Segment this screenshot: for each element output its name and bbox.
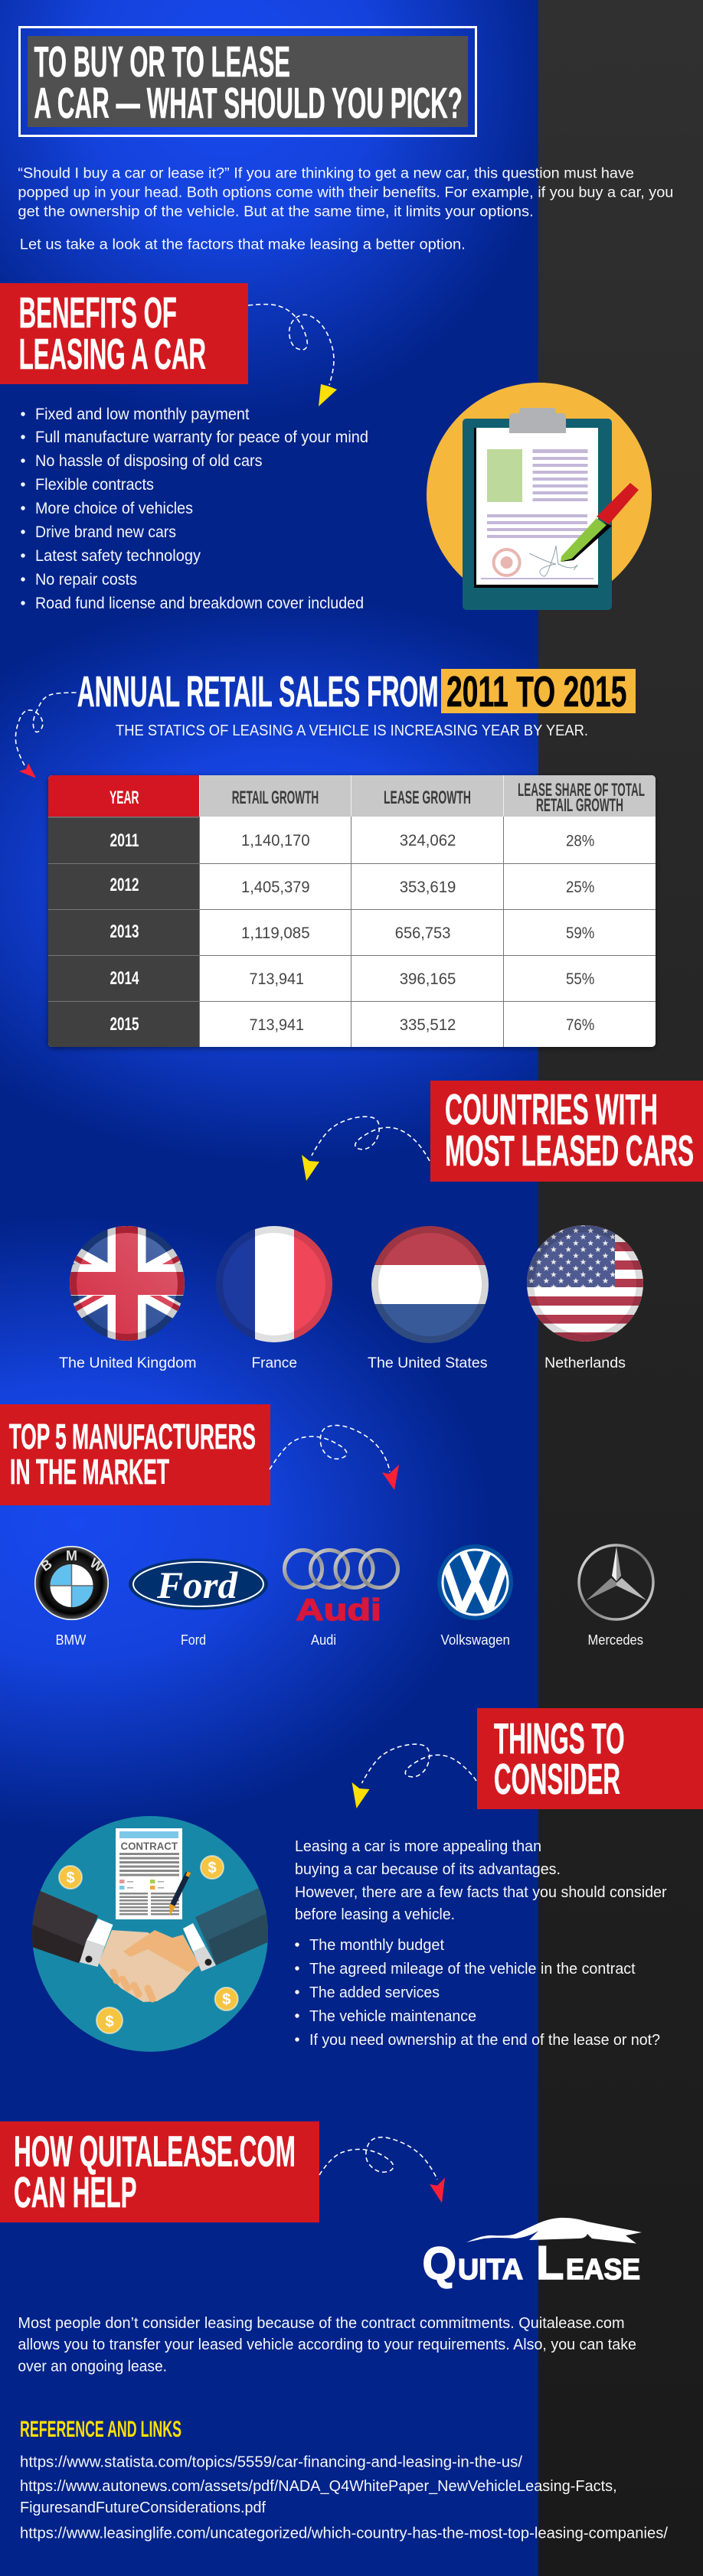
benefits list: No repair costs <box>35 571 137 589</box>
row 2012 <box>110 875 594 896</box>
heading: quitalease <box>0 2121 319 2222</box>
quitalease paragraph <box>18 2315 636 2375</box>
table header: RETAIL GROWTH <box>536 795 623 816</box>
quitalease paragraph: over an ongoing lease. <box>18 2359 167 2375</box>
panel: things to consider <box>23 1708 703 2052</box>
row 2015: 713,941 <box>250 1016 304 1034</box>
row 2015 <box>110 1014 594 1035</box>
arrow: dashed yellow <box>352 1744 476 1808</box>
row 2013 <box>110 921 594 942</box>
row 2013: 656,753 <box>395 924 450 942</box>
heading: references: REFERENCE AND LINKS <box>20 2417 181 2442</box>
country labels <box>59 1355 626 1371</box>
row 2013: 1,119,085 <box>241 924 310 942</box>
row 2014: 2014 <box>110 968 139 989</box>
row 2012: 353,619 <box>400 879 456 896</box>
row 2011 <box>110 830 594 851</box>
contract sheet: CONTRACT <box>121 1840 178 1852</box>
row 2011: 28% <box>566 833 594 849</box>
heading: manufacturers <box>0 1404 270 1505</box>
benefits list: Flexible contracts <box>35 476 154 494</box>
panel: countries <box>12 1081 703 1371</box>
arrow: dashed yellow <box>302 1117 430 1181</box>
row 2012: 1,405,379 <box>241 879 310 896</box>
panel: how quitalease can help <box>0 2121 642 2375</box>
consider list: The vehicle maintenance <box>309 2007 476 2025</box>
table header: YEAR <box>110 787 139 808</box>
row 2012: 2012 <box>110 875 139 895</box>
benefits list: Full manufacture warranty for peace of your mind <box>35 429 368 446</box>
logo: Mercedes <box>579 1545 653 1619</box>
intro text <box>18 165 673 253</box>
logo: Quita Lease: EASE <box>566 2254 640 2286</box>
quitalease paragraph: Most people don’t consider leasing because of the contract commitments. Quitalease.com <box>18 2315 625 2332</box>
logo: BMW <box>34 1546 109 1620</box>
title block <box>20 28 476 136</box>
reference links: https://www.autonews.com/assets/pdf/NADA_Q4WhitePaper_NewVehicleLeasing-Facts, <box>20 2478 617 2495</box>
table header: RETAIL GROWTH <box>232 787 319 808</box>
row 2013: 2013 <box>110 921 139 942</box>
flag: France <box>216 1226 332 1342</box>
benefits list: Drive brand new cars <box>35 523 176 541</box>
row 2011: 2011 <box>110 830 139 851</box>
benefits list: Road fund license and breakdown cover included <box>35 595 364 612</box>
country labels: France <box>251 1355 297 1371</box>
flag: Netherlands colours <box>371 1226 489 1343</box>
icon: clipboard contract <box>427 383 652 610</box>
logo: Ford <box>129 1558 268 1610</box>
heading: manufacturers: TOP 5 MANUFACTURERS <box>9 1417 256 1456</box>
coin dollar signs: $ <box>66 1870 75 1886</box>
consider list: The monthly budget <box>309 1936 444 1954</box>
heading: manufacturers: IN THE MARKET <box>10 1452 169 1492</box>
panel: references <box>20 2417 668 2542</box>
benefits list <box>21 406 368 612</box>
reference links: FiguresandFutureConsiderations.pdf <box>20 2499 266 2516</box>
manufacturer labels: Audi <box>311 1632 336 1648</box>
heading: countries <box>430 1081 703 1182</box>
contract sheet <box>116 1828 182 1919</box>
benefits list: No hassle of disposing of old cars <box>35 452 262 470</box>
benefits list: Latest safety technology <box>35 547 201 565</box>
cuffs <box>80 1919 216 1971</box>
subheading: THE STATICS OF LEASING A VEHICLE IS INCREASING YEAR BY YEAR. <box>116 722 588 739</box>
sleeves <box>32 1888 268 1965</box>
panel: annual retail sales <box>15 667 656 1047</box>
logo: Audi <box>285 1550 398 1627</box>
arrow: dashed red <box>15 693 77 778</box>
arrow: dashed yellow <box>248 305 337 406</box>
pen <box>169 1873 190 1916</box>
coins <box>59 1856 238 2033</box>
country labels: Netherlands <box>544 1355 626 1371</box>
row 2014: 713,941 <box>250 970 304 988</box>
arrow: dashed red <box>270 1425 399 1490</box>
logo: Quita Lease: Q <box>423 2238 456 2289</box>
heading: things to consider <box>477 1708 703 1809</box>
consider list <box>295 1936 660 2049</box>
row 2014 <box>110 968 594 989</box>
panel: manufacturers <box>0 1404 653 1648</box>
coin dollar signs <box>66 1860 231 2030</box>
intro text: get the ownership of the vehicle. But at the same time, it limits your options. <box>18 204 534 220</box>
heading: benefits: BENEFITS OF <box>19 289 177 337</box>
coin dollar signs: $ <box>222 1991 231 2008</box>
consider list: The agreed mileage of the vehicle in the contract <box>309 1960 636 1978</box>
heading: quitalease: CAN HELP <box>14 2168 137 2217</box>
intro text: “Should I buy a car or lease it?” If you are thinking to get a new car, this question must have <box>18 165 634 182</box>
table header <box>110 780 645 816</box>
table header: LEASE GROWTH <box>384 787 471 808</box>
manufacturer labels: Volkswagen <box>441 1632 510 1648</box>
row 2015: 335,512 <box>400 1016 456 1034</box>
table <box>48 775 656 1047</box>
country labels: The United Kingdom <box>59 1355 196 1371</box>
coin dollar signs: $ <box>208 1860 217 1877</box>
title text <box>34 37 463 128</box>
logo: Audi: Audi <box>296 1593 381 1627</box>
hands <box>99 1930 199 2002</box>
heading: quitalease: HOW QUITALEASE.COM <box>14 2128 296 2177</box>
row 2011: 1,140,170 <box>241 832 310 849</box>
quitalease paragraph: allows you to transfer your leased vehicle according to your requirements. Also, you can take <box>18 2336 636 2353</box>
logo: Quita Lease <box>423 2218 642 2290</box>
consider intro text: before leasing a vehicle. <box>295 1906 455 1923</box>
row 2014: 55% <box>566 970 594 988</box>
intro text: popped up in your head. Both options come with their benefits. For example, if you buy a car, you <box>18 184 673 201</box>
logo: BMW: W <box>87 1555 106 1575</box>
row 2015: 2015 <box>110 1014 139 1035</box>
manufacturer labels: Mercedes <box>588 1632 643 1648</box>
manufacturer labels <box>56 1632 643 1648</box>
consider list: The added services <box>309 1984 440 2001</box>
logo: BMW: B <box>38 1556 55 1574</box>
benefits list: Fixed and low monthly payment <box>35 406 250 423</box>
consider intro text: buying a car because of its advantages. <box>295 1860 561 1878</box>
coin dollar signs: $ <box>105 2014 114 2030</box>
reference links <box>20 2454 668 2542</box>
flag: UK <box>70 1226 185 1341</box>
row 2011: 324,062 <box>400 832 456 849</box>
logo: Ford: Ford <box>156 1564 238 1606</box>
consider intro text: Leasing a car is more appealing than <box>295 1837 541 1855</box>
manufacturer labels: Ford <box>181 1632 206 1648</box>
row 2014: 396,165 <box>400 970 456 988</box>
logo: Quita Lease: UITA <box>458 2254 523 2286</box>
logo: BMW: M <box>66 1548 77 1564</box>
benefits list: More choice of vehicles <box>35 500 193 517</box>
row 2013: 59% <box>566 924 594 942</box>
manufacturer labels: BMW <box>56 1632 86 1648</box>
logo: Quita Lease: L <box>536 2237 564 2290</box>
heading: benefits <box>0 283 248 384</box>
country labels: The United States <box>368 1355 487 1371</box>
consider intro text <box>295 1837 667 1923</box>
intro text: Let us take a look at the factors that make leasing a better option. <box>20 236 466 253</box>
flag: USA <box>527 1224 643 1342</box>
reference links: https://www.statista.com/topics/5559/car-financing-and-leasing-in-the-us/ <box>20 2454 522 2470</box>
title text: TO BUY OR TO LEASE <box>34 37 290 86</box>
row 2015: 76% <box>566 1016 594 1034</box>
reference links: https://www.leasinglife.com/uncategorized/which-country-has-the-most-top-leasing-companies/ <box>20 2525 668 2542</box>
row 2012: 25% <box>566 879 594 896</box>
consider list: If you need ownership at the end of the lease or not? <box>309 2031 660 2049</box>
panel: benefits of leasing <box>0 283 652 612</box>
heading: benefits: LEASING A CAR <box>19 330 206 379</box>
icon: handshake and contract <box>23 1816 276 2052</box>
arrow: dashed red <box>319 2137 445 2203</box>
consider intro text: However, there are a few facts that you should consider <box>295 1883 667 1901</box>
logo: Volkswagen <box>437 1544 513 1620</box>
